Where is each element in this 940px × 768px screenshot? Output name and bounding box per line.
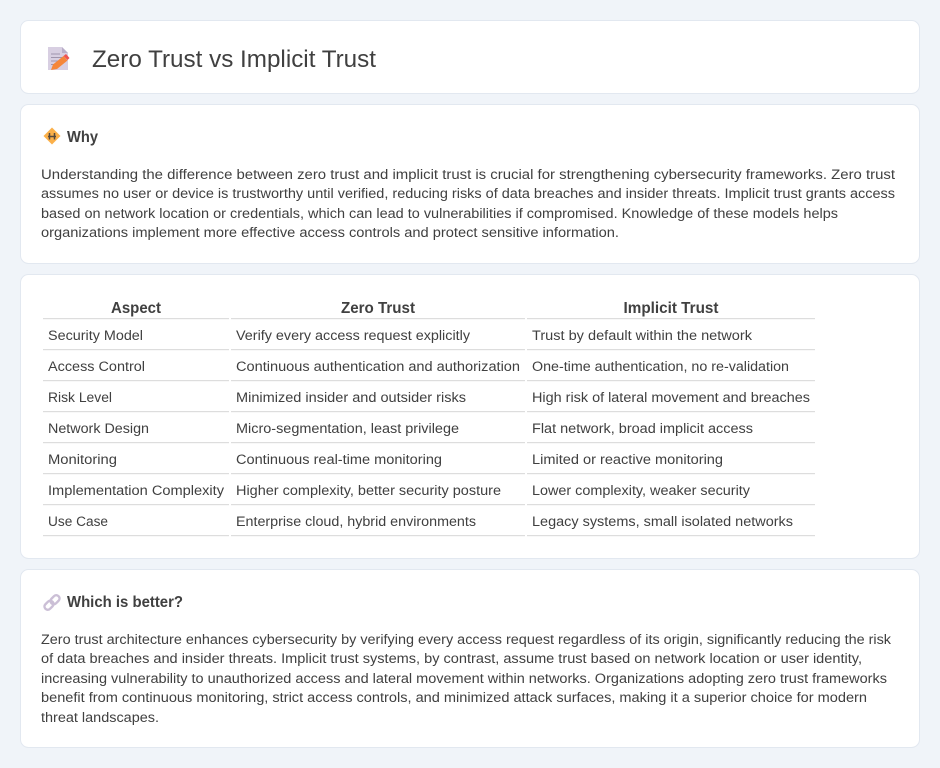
row: network design: Micro-segmentation, least privilege <box>236 421 459 437</box>
panel: why <box>20 104 920 264</box>
icon: memo with pencil <box>48 47 70 70</box>
text block: which is better: threat landscapes. <box>41 710 159 726</box>
icon: chain link <box>43 594 61 611</box>
table header row: Implicit Trust <box>624 300 719 317</box>
row: security model: Trust by default within the network <box>532 328 753 344</box>
text block: which is better: Zero trust architecture enhances cybersecurity by verifying every access request regardless of its origin, significantly reducing the risk <box>41 632 892 648</box>
text block: which is better: benefit from continuous monitoring, strict access controls, and minimized attack surfaces, making it a superior choice for modern <box>41 690 867 706</box>
table header row: Zero Trust <box>341 300 416 317</box>
row: use case: Enterprise cloud, hybrid environments <box>236 514 476 530</box>
heading: why: Why <box>67 129 98 146</box>
row: risk level: Minimized insider and outsider risks <box>236 390 466 406</box>
row: risk level: Risk Level <box>48 390 112 406</box>
text block: why <box>41 167 895 241</box>
row: monitoring <box>48 452 723 468</box>
row: security model <box>48 328 753 344</box>
row: implementation complexity <box>48 483 751 499</box>
text block: why: assumes no user or device is trustworthy until verified, reducing risks of data breaches and insider threats. Implicit trust grants access <box>41 186 895 202</box>
panel: comparison table <box>20 274 920 558</box>
heading: which is better: Which is better? <box>67 594 183 611</box>
row: risk level <box>48 390 810 406</box>
text block: why: Understanding the difference between zero trust and implicit trust is crucial for strengthening cybersecurity frameworks. Zero trust <box>41 167 895 183</box>
row: network design <box>48 421 753 437</box>
row: access control: Access Control <box>48 359 145 375</box>
text block: why: organizations implement more effective access controls and protect sensitive information. <box>41 225 619 241</box>
row: access control: One-time authentication, no re-validation <box>532 359 789 375</box>
title: Zero Trust vs Implicit Trust <box>92 46 376 73</box>
row: security model: Verify every access request explicitly <box>236 328 471 344</box>
row: risk level: High risk of lateral movement and breaches <box>532 390 810 406</box>
panel: which is better <box>20 570 920 748</box>
row: monitoring: Monitoring <box>48 452 117 468</box>
table header row <box>111 300 719 317</box>
text block: which is better: of data breaches and insider threats. Implicit trust systems, by contrast, assume trust based on network location or user identity, <box>41 651 862 667</box>
row: network design: Network Design <box>48 421 149 437</box>
row: network design: Flat network, broad implicit access <box>532 421 753 437</box>
row: access control <box>48 359 789 375</box>
table header row: Aspect <box>111 300 162 317</box>
row: implementation complexity: Lower complexity, weaker security <box>532 483 751 499</box>
row: security model: Security Model <box>48 328 143 344</box>
text block: why: based on network location or credentials, which can lead to vulnerabilities if compromised. Knowledge of these models helps <box>41 206 838 222</box>
header panel <box>20 20 920 94</box>
row: monitoring: Limited or reactive monitoring <box>532 452 723 468</box>
row: use case: Use Case <box>48 514 108 530</box>
row: use case <box>48 514 793 530</box>
icon: diamond warning sign <box>44 128 60 144</box>
row: implementation complexity: Higher complexity, better security posture <box>236 483 501 499</box>
row: monitoring: Continuous real-time monitoring <box>236 452 442 468</box>
row: implementation complexity: Implementation Complexity <box>48 483 225 499</box>
text block: which is better: increasing vulnerability to unauthorized access and lateral movement within networks. Organizations adopting zero trust frameworks <box>41 671 887 687</box>
row: access control: Continuous authentication and authorization <box>236 359 520 375</box>
text block: which is better <box>41 632 892 726</box>
row: use case: Legacy systems, small isolated networks <box>532 514 793 530</box>
